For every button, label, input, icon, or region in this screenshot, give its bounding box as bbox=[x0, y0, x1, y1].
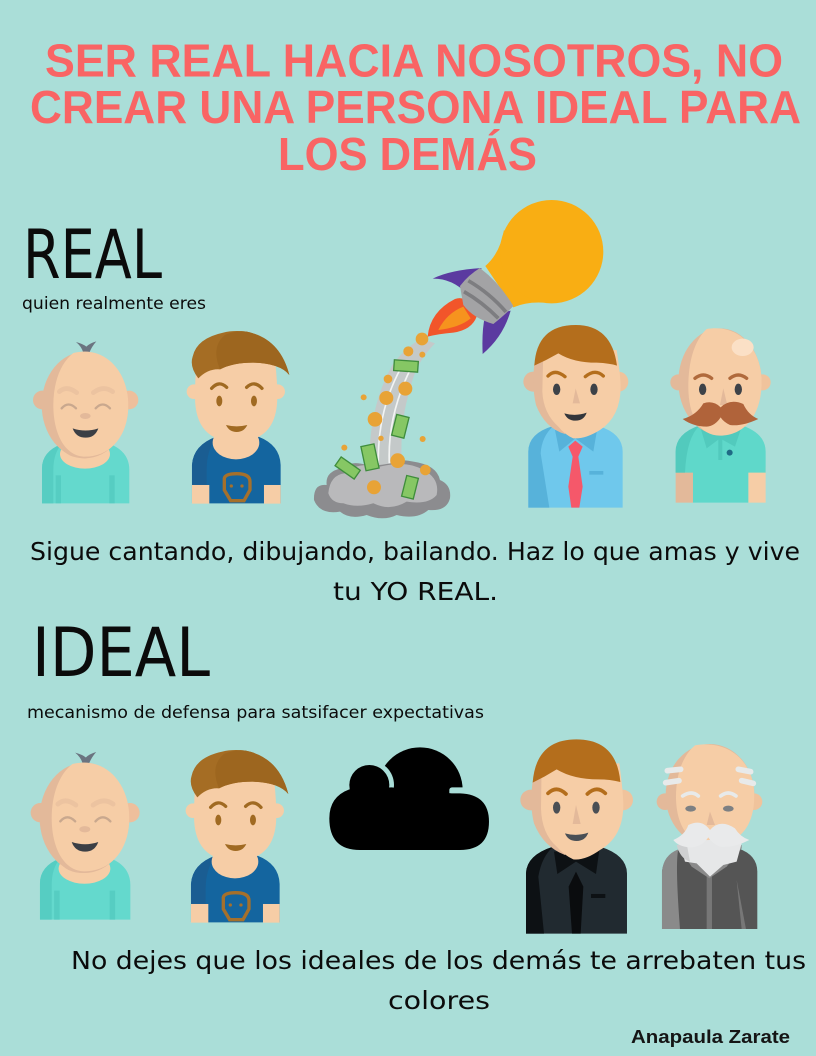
bulb bbox=[485, 230, 543, 307]
body text: real bbox=[30, 537, 800, 606]
coins bbox=[341, 333, 431, 494]
character: old man with beard bbox=[657, 744, 762, 929]
screw base bbox=[460, 268, 513, 324]
icon: black cloud bbox=[329, 747, 489, 850]
character: baby (ideal) bbox=[31, 752, 140, 920]
character: baby (real) bbox=[33, 341, 138, 503]
body text: ideal: No dejes que los ideales de los demás te arrebaten tus bbox=[71, 946, 806, 975]
author credit: Anapaula Zarate bbox=[631, 1027, 790, 1047]
subtitle: real: quien realmente eres bbox=[22, 294, 206, 314]
character: boy (real) bbox=[187, 331, 289, 504]
character: man in blue shirt bbox=[523, 325, 628, 508]
fins bbox=[433, 268, 482, 293]
body text: real: Sigue cantando, dibujando, bailando. Haz lo que amas y vive bbox=[30, 537, 800, 566]
character: boy (ideal) bbox=[186, 750, 288, 923]
smoke cloud bbox=[314, 460, 450, 518]
money bills bbox=[335, 360, 418, 499]
body text: ideal: colores bbox=[388, 986, 490, 1015]
subtitle: ideal: mecanismo de defensa para satsifacer expectativas bbox=[27, 703, 484, 723]
smoke trail bbox=[369, 338, 435, 467]
body text: real: tu YO REAL. bbox=[333, 577, 498, 606]
body text: ideal bbox=[71, 946, 806, 1015]
heading: REAL: REAL bbox=[23, 216, 162, 295]
character: man with moustache bbox=[670, 328, 771, 503]
heading: IDEAL: IDEAL bbox=[32, 614, 210, 693]
title: CREAR UNA PERSONA IDEAL PARA bbox=[30, 81, 801, 133]
illustration: lightbulb rocket bbox=[314, 200, 603, 518]
title: LOS DEMÁS bbox=[278, 128, 537, 180]
title bbox=[30, 34, 801, 180]
flame bbox=[428, 298, 477, 337]
title: SER REAL HACIA NOSOTROS, NO bbox=[45, 34, 783, 86]
character: man in black suit bbox=[520, 739, 633, 934]
